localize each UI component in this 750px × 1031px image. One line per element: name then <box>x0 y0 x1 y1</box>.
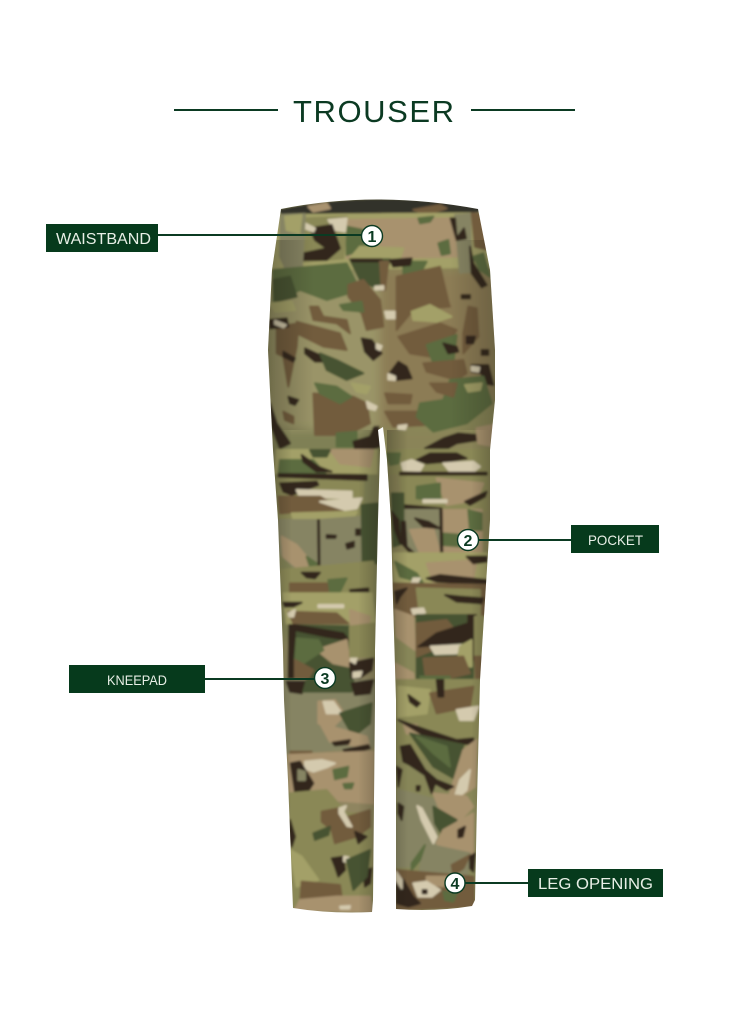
fly <box>380 262 388 290</box>
marker 1: 1 <box>368 229 377 246</box>
marker 2: 2 <box>464 533 473 550</box>
trousers illustration <box>260 190 500 920</box>
camo: lower legs <box>283 680 480 912</box>
callout: kneepad <box>69 665 336 693</box>
left leg upper <box>275 450 377 473</box>
flap pocket <box>279 478 363 518</box>
left kneepad <box>290 625 350 683</box>
left lower leg <box>286 677 366 751</box>
right kneepad <box>417 615 475 683</box>
camo: pockets and kneepads <box>275 450 493 690</box>
marker 4: 4 <box>451 876 460 893</box>
right leg upper <box>424 447 448 454</box>
marker 3: 3 <box>321 671 330 688</box>
right lower leg <box>396 678 478 690</box>
callout: pocket <box>458 525 659 553</box>
camo: waist and hips <box>269 200 495 452</box>
callout: waistband: WAISTBAND <box>56 231 151 248</box>
callout: pocket: POCKET <box>588 532 643 548</box>
upper-right thigh <box>401 260 428 275</box>
callout: leg opening <box>445 869 663 897</box>
right flap pocket <box>400 473 487 510</box>
edge shading on legs <box>268 240 496 915</box>
marker 4 <box>445 873 465 893</box>
below pocket <box>280 562 373 597</box>
pocket body <box>278 519 318 562</box>
callout: kneepad: KNEEPAD <box>107 672 167 688</box>
marker 2 <box>458 530 478 550</box>
marker 1 <box>362 226 382 246</box>
title: TROUSER <box>293 94 454 129</box>
below right pocket <box>393 553 487 583</box>
upper-left thigh <box>273 263 360 303</box>
callout: waistband <box>46 224 382 252</box>
right pocket body <box>403 510 442 558</box>
marker 3 <box>314 668 336 688</box>
callout: leg opening: LEG OPENING <box>538 876 653 893</box>
